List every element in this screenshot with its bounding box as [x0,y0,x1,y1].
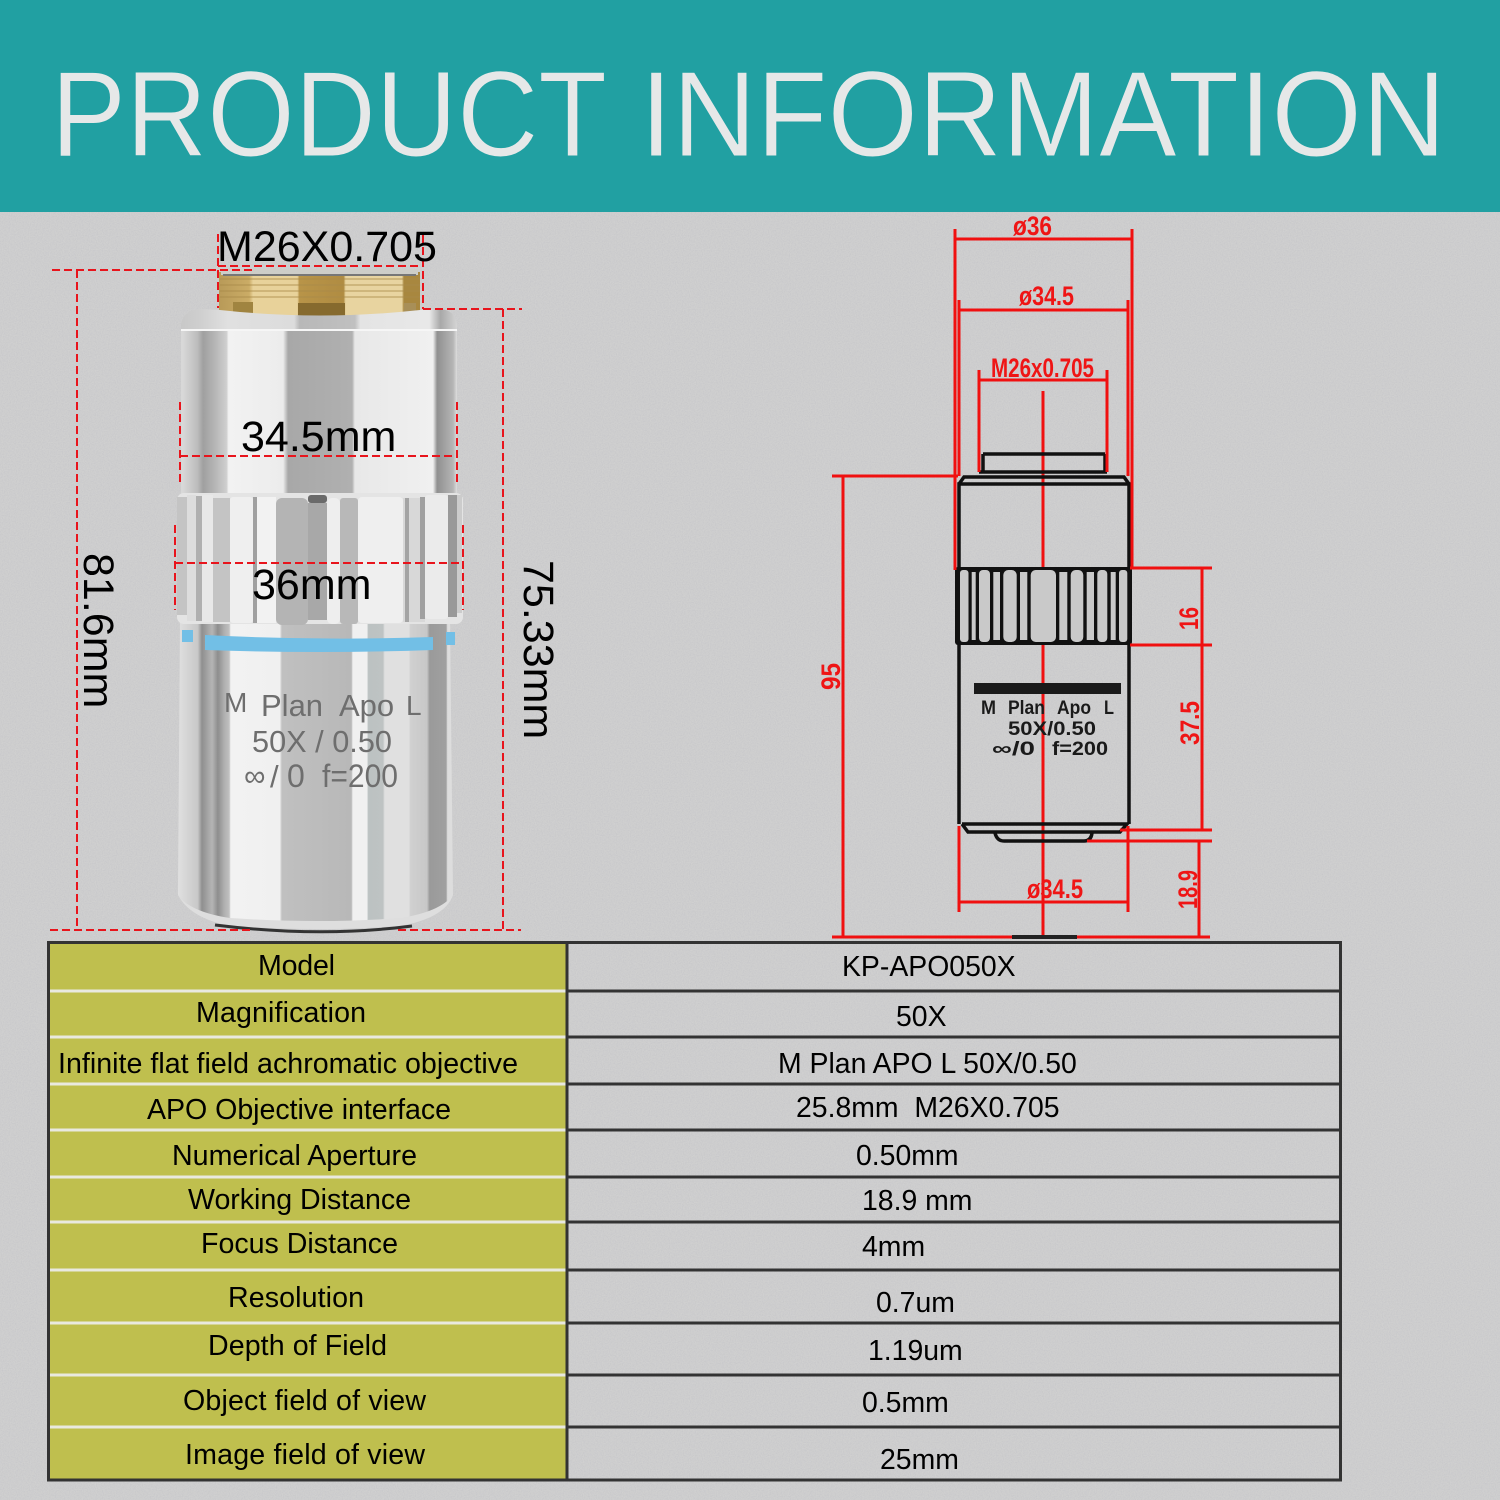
objective lens product photo [177,269,463,932]
table value text: 25.8mm M26X0.705 [796,1092,1060,1124]
drawing engraving: L [1104,698,1114,719]
title: PRODUCT [51,46,607,182]
table value text: 25mm [880,1444,959,1476]
table label text: Infinite flat field achromatic objective [58,1048,518,1080]
engraved lens text: ∞ [244,760,265,793]
table value text: KP-APO050X [842,951,1016,983]
label: thread size: M26X0.705 [217,223,437,271]
table frame [48,942,1340,1480]
title: INFORMATION [640,46,1446,182]
engraved lens text: / [270,759,279,794]
table value text: 0.50mm [856,1140,959,1172]
bottom chamfer [178,895,453,929]
upper barrel [181,325,457,497]
drawing knurled ring [955,567,1132,645]
engraved lens text [224,687,422,794]
table value text: 4mm [862,1231,925,1263]
engraved lens text: Apo [339,688,394,723]
lens dimension labels [74,223,562,739]
drawing engraving: ∞/0 [992,739,1035,760]
drawing engraving: Plan [1008,698,1045,719]
red dimension text: ø34.5 [1019,281,1074,311]
red dimension text: 16 [1174,607,1204,630]
table row separators [50,991,566,1427]
drawing engraving: M [981,698,996,719]
technical drawing [816,211,1212,939]
table value text: 0.5mm [862,1387,949,1419]
brass thread [219,269,420,318]
engraved lens text: 0 [287,758,305,794]
engraved lens text: 50X / 0.50 [252,724,392,759]
table label text: Resolution [228,1282,364,1314]
red dashed dimension lines [50,234,522,930]
blue band [182,630,455,652]
engraved lens text: L [406,690,422,721]
table value text [778,951,1077,1476]
table label text: APO Objective interface [147,1094,451,1126]
table label text: Magnification [196,997,366,1029]
table value text: M Plan APO L 50X/0.50 [778,1048,1077,1080]
header banner [0,0,1500,212]
knurled ring [177,493,463,625]
drawing outline [959,454,1129,841]
red dimension lines [832,229,1212,937]
table label text: Focus Distance [201,1228,398,1260]
engraved lens text: f=200 [322,758,398,794]
table value text: 50X [896,1001,947,1033]
red dimension text: ø36 [1013,211,1052,241]
table label text: Working Distance [188,1184,411,1216]
red dimension text: 95 [816,663,846,690]
drawing engraving: 50X/0.50 [1008,719,1096,740]
table value text: 1.19um [868,1335,963,1367]
engraved lens text: M [224,687,247,718]
drawing engraving: f=200 [1052,739,1108,760]
drawing engraving [974,683,1121,760]
red dimension text [816,211,1205,909]
engraved lens text: Plan [261,688,323,723]
lower barrel [178,620,453,923]
label: barrel diameter: 34.5mm [241,413,396,461]
bottom shadow [215,925,412,932]
specification table [48,942,1340,1480]
drawing base segment [1012,935,1077,939]
table label column fill [50,944,566,1479]
red dimension text: 37.5 [1175,701,1205,745]
table label text: Model [258,950,335,982]
red dimension text: ø34.5 [1027,874,1083,904]
table label text [58,950,518,1471]
label: parfocal height: 75.33mm [514,560,562,739]
table label text: Depth of Field [208,1330,387,1362]
table value text: 18.9 mm [862,1185,972,1217]
top collar [181,309,457,331]
center line [1042,391,1044,937]
table label text: Image field of view [185,1439,425,1471]
table label text: Object field of view [183,1385,426,1417]
drawing engraving: Apo [1057,698,1091,719]
red dimension text: 18.9 [1173,870,1203,909]
label: ring diameter: 36mm [252,561,371,609]
label: overall height: 81.6mm [74,553,122,708]
table value rules [568,991,1340,1427]
red dimension text: M26x0.705 [991,353,1094,383]
table label text: Numerical Aperture [172,1140,417,1172]
table value text: 0.7um [876,1287,955,1319]
